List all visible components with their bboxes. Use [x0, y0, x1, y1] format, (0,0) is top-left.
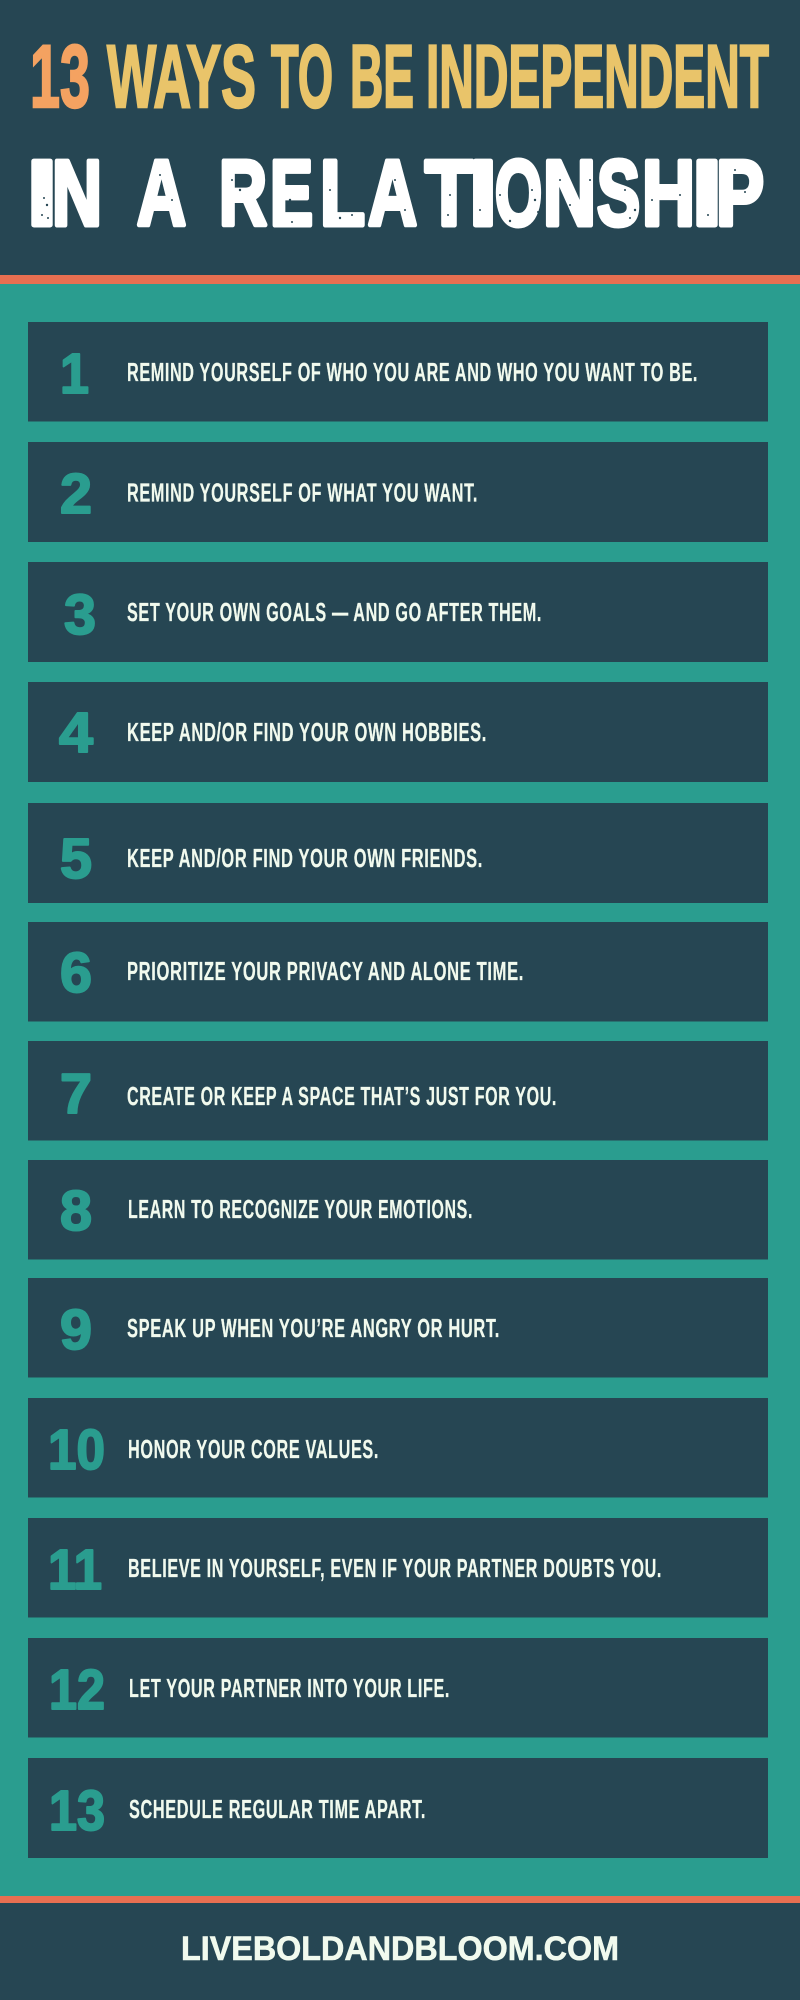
item 13: 13	[49, 1779, 105, 1843]
item 6	[28, 922, 768, 1022]
item 13	[28, 1758, 768, 1858]
title line 2: L	[320, 141, 365, 245]
item 5	[28, 803, 768, 903]
item 9: SPEAK UP WHEN YOU’RE ANGRY OR HURT.	[127, 1315, 500, 1343]
item 6: 6	[60, 941, 92, 1005]
item 10: HONOR YOUR CORE VALUES.	[128, 1436, 379, 1464]
item 10: 10	[48, 1418, 105, 1482]
title line 2: I	[469, 141, 497, 245]
item 4: 4	[59, 701, 93, 765]
item 4: KEEP AND/OR FIND YOUR OWN HOBBIES.	[127, 719, 487, 747]
item 3	[28, 562, 768, 662]
item 13: SCHEDULE REGULAR TIME APART.	[129, 1796, 426, 1824]
header panel	[0, 0, 800, 275]
item 1	[28, 322, 768, 422]
title line 2: S	[597, 141, 640, 245]
item 5: 5	[60, 827, 92, 891]
title line 2: N	[543, 141, 596, 245]
footer panel	[0, 1903, 800, 2000]
accent bar bottom	[0, 1896, 800, 1903]
title line 1: TO	[271, 26, 333, 126]
title line 2: N	[52, 141, 102, 245]
title line 2: E	[270, 141, 313, 245]
title line 1: BE	[350, 26, 414, 126]
title line 2: I	[692, 141, 722, 245]
title line 2: P	[716, 141, 764, 245]
item 7: 7	[60, 1062, 92, 1126]
title line 2: I	[27, 141, 57, 245]
item 12: 12	[49, 1658, 105, 1722]
item 8	[28, 1160, 768, 1260]
item 8: 8	[60, 1179, 92, 1243]
item 11	[28, 1518, 768, 1618]
item 2	[28, 442, 768, 542]
item 4	[28, 682, 768, 782]
title line 2: A	[368, 141, 417, 245]
title line 1: 13	[30, 26, 90, 126]
title line 2: O	[495, 141, 542, 245]
title line 1	[30, 26, 769, 126]
title line 2: T	[425, 141, 473, 245]
item 5: KEEP AND/OR FIND YOUR OWN FRIENDS.	[127, 845, 483, 873]
item 9	[28, 1278, 768, 1378]
item 7: CREATE OR KEEP A SPACE THAT’S JUST FOR YOU.	[127, 1083, 557, 1111]
item 3: 3	[64, 583, 96, 647]
item 8: LEARN TO RECOGNIZE YOUR EMOTIONS.	[128, 1196, 473, 1224]
item 1: 1	[60, 342, 89, 406]
item 12: LET YOUR PARTNER INTO YOUR LIFE.	[129, 1675, 450, 1703]
footer website text: LIVEBOLDANDBLOOM.COM	[181, 1930, 619, 1968]
item 2: 2	[60, 462, 92, 526]
title line 2: A	[137, 141, 186, 245]
item 7	[28, 1041, 768, 1140]
title line 2: R	[219, 141, 267, 245]
title line 2: H	[642, 141, 695, 245]
title line 1: WAYS	[107, 26, 256, 126]
item 2: REMIND YOURSELF OF WHAT YOU WANT.	[127, 480, 478, 508]
item 3: SET YOUR OWN GOALS — AND GO AFTER THEM.	[127, 599, 542, 627]
item 10	[28, 1398, 768, 1498]
item 12	[28, 1638, 768, 1738]
accent bar top	[0, 275, 800, 284]
title line 2	[27, 141, 764, 245]
item 6: PRIORITIZE YOUR PRIVACY AND ALONE TIME.	[127, 958, 524, 986]
item 9: 9	[60, 1298, 92, 1362]
item 11: 11	[48, 1538, 102, 1602]
